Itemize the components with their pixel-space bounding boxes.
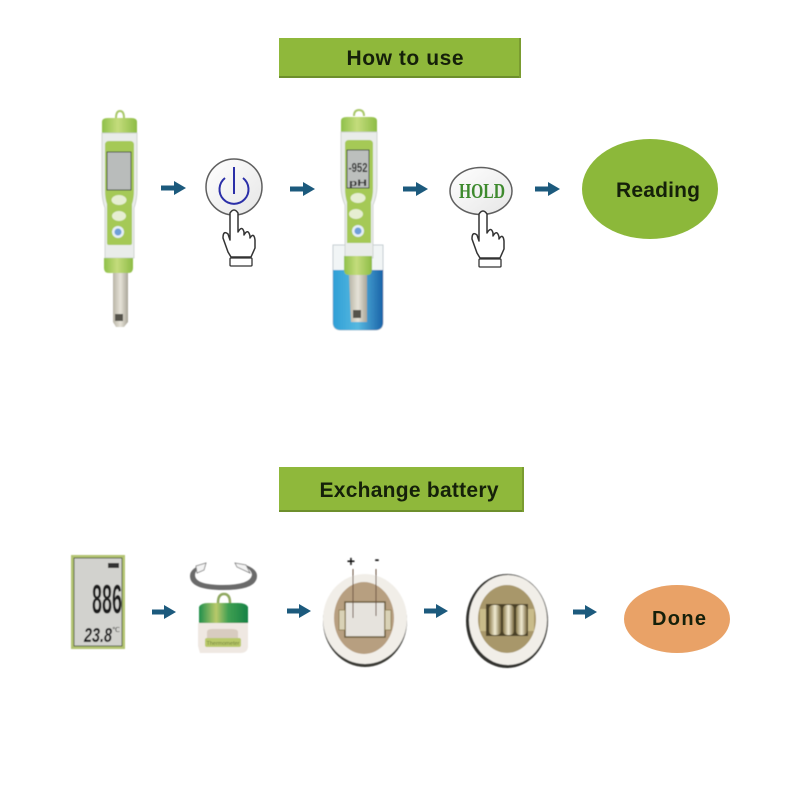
arrow (152, 605, 176, 619)
icon: rotation ring (190, 563, 257, 590)
icon: hold button with hand (450, 168, 512, 267)
icon: open battery compartment (323, 551, 407, 667)
infographic canvas: 886 (92, 576, 122, 622)
icon: pen meter in beaker: -952 (348, 160, 368, 175)
heading: How to use: How to use (346, 47, 464, 70)
heading: How to use (279, 38, 521, 78)
icon: rotate cap: Thermometer (206, 641, 240, 647)
negative marker: - (375, 551, 380, 567)
callout: Done (624, 585, 730, 653)
icon: pen meter (102, 111, 137, 327)
positive marker: + (347, 553, 355, 569)
arrow (573, 605, 597, 619)
icon: pen meter in beaker (333, 110, 383, 330)
arrow (290, 182, 315, 196)
icon: LCD display: 23.8 (83, 625, 113, 647)
icon: pen meter in beaker: pH (349, 178, 367, 188)
heading: Exchange battery: Exchange battery (320, 479, 499, 502)
arrow (535, 182, 560, 196)
icon: LCD display (71, 555, 125, 649)
heading: Exchange battery (279, 467, 524, 512)
arrow (161, 181, 186, 195)
icon: rotate cap (190, 563, 257, 653)
icon: power button with hand (206, 159, 262, 266)
arrow (287, 604, 311, 618)
arrow (424, 604, 448, 618)
callout: Reading: Reading (616, 179, 700, 202)
icon: hold button with hand: HOLD (459, 179, 505, 203)
icon: LCD display: ℃ (112, 627, 120, 634)
icon: batteries installed (466, 574, 548, 668)
callout: Reading (582, 139, 718, 239)
callout: Done: Done (652, 608, 706, 630)
arrow (403, 182, 428, 196)
